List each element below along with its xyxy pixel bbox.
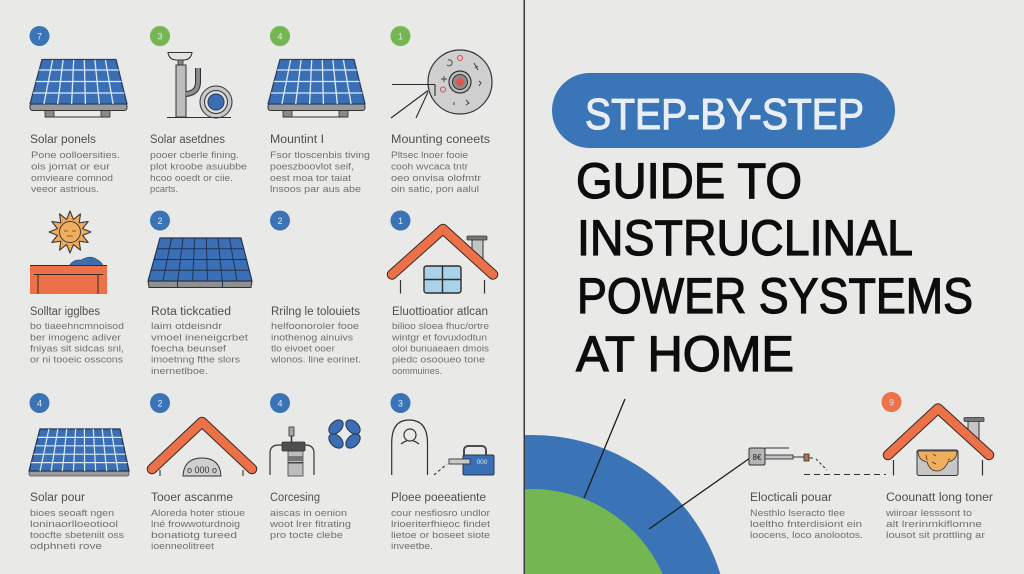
card text: oeo onvisa olofmtr <box>391 173 481 184</box>
card text <box>391 150 481 195</box>
card text <box>30 508 124 552</box>
badge: 2: 2 <box>157 216 163 226</box>
step card: corcesing <box>269 393 363 541</box>
card text: woot lrer fitrating <box>269 519 351 530</box>
card text <box>30 321 124 366</box>
card text: or ni tooeic osscons <box>30 354 123 366</box>
card text: Nesthlo lseracto tlee <box>750 508 845 519</box>
badge: 7 <box>30 26 50 46</box>
badge: 4 <box>30 393 50 413</box>
card title: Solar pour <box>30 492 85 504</box>
step card: rrilng le tolouiets <box>270 210 361 366</box>
icon: pole and wheel <box>167 52 232 118</box>
card text: wiiroar lesssont to <box>885 508 972 519</box>
card text: aiscas in oenion <box>270 508 347 519</box>
main heading: AT HOME <box>576 326 794 382</box>
badge: 3 <box>390 393 410 413</box>
icon: probe with cables and petals <box>270 417 363 476</box>
card text: oommuines. <box>392 366 442 377</box>
step card: counting toner <box>882 392 993 541</box>
badge: 4: 4 <box>277 398 283 408</box>
icon: person arch and lock: 000 <box>477 459 488 466</box>
card text: lné frowwoturdnoig <box>151 519 240 530</box>
chart: concentric quarter circle <box>525 399 750 574</box>
step card: tower assembly <box>150 393 252 552</box>
step card: solar pour <box>29 393 129 552</box>
badge: 1 <box>390 210 410 230</box>
step card: solar assemblies <box>150 26 247 195</box>
card text: loocens, loco anolootos. <box>750 530 863 541</box>
card text <box>150 150 247 195</box>
badge: 1 <box>390 26 410 46</box>
badge: 1: 1 <box>398 216 403 226</box>
card title: Mountint I <box>270 134 324 146</box>
step card: solar panels <box>30 26 127 195</box>
card text: inernetlboe. <box>151 366 208 377</box>
badge: 2 <box>270 210 290 230</box>
card text: fniyas sit sidcas snl, <box>30 344 124 354</box>
card text: loeltho fnterdisiont ein <box>750 519 862 530</box>
panel: step cards <box>29 26 494 552</box>
card text: lrioeriterfhieoc findet <box>391 519 490 530</box>
card text: ois jomat or eur <box>31 162 110 172</box>
icon: person arch and lock <box>392 420 494 475</box>
card text: veeor astrious. <box>31 184 99 195</box>
title pill <box>552 73 895 148</box>
card text: lietoe or boseet siote <box>391 530 490 541</box>
card text: ber imogenc adiver <box>30 332 121 344</box>
card title: Rrilng le tolouiets <box>271 306 360 318</box>
card text: cooh wvcaca tntr <box>391 162 468 172</box>
badge: 9 <box>882 392 902 412</box>
card text: pro tocte clebe <box>270 530 343 541</box>
card text: vmoel ineneigcrbet <box>151 332 248 344</box>
badge: 7: 7 <box>37 32 42 42</box>
icon: sun over roof <box>30 211 107 294</box>
step card: ploee poeeatiente <box>390 393 494 552</box>
card title: Solar ponels <box>30 134 96 146</box>
card text: inveetbe. <box>391 541 433 552</box>
badge: 2: 2 <box>277 216 283 226</box>
card title: Rota tickcatied <box>151 306 231 318</box>
card text: alt lrerinmkiflomne <box>886 519 982 530</box>
card text: foecha beunsef <box>151 344 226 354</box>
card text: wlonos. line eorinet. <box>270 354 361 366</box>
icon: gauge dial <box>391 50 492 118</box>
card text: ioenneolitreet <box>151 541 214 552</box>
card text: oest moa tor taiat <box>270 173 351 184</box>
card text: cour nesfiosro undlor <box>391 508 490 519</box>
title pill: STEP-BY-STEP <box>585 90 864 139</box>
badge: 4 <box>270 393 290 413</box>
card text: lnsoos par aus abe <box>270 184 361 195</box>
card text <box>270 150 370 195</box>
step card: mounting connects <box>390 26 492 195</box>
card text: odphneti rove <box>30 541 102 552</box>
badge: 2 <box>150 210 170 230</box>
card text: laim otdeisndr <box>151 321 222 332</box>
card text: bo tiaeehncmnoisod <box>30 321 124 332</box>
card text <box>270 321 361 366</box>
card title: Tooer ascanme <box>151 492 233 504</box>
card title: Solar asetdnes <box>150 134 225 146</box>
card text <box>750 508 863 541</box>
card text: lousot sit prottling ar <box>886 530 985 541</box>
card title: Mounting coneets <box>391 134 490 146</box>
card text: wintgr et fovuxlodtun <box>391 332 487 344</box>
card text: oloi bunuaeaen dmois <box>392 344 489 354</box>
card text: pooer cberle fining. <box>150 150 239 161</box>
main heading: INSTRUCLINAL <box>577 210 913 266</box>
icon: solar panel <box>30 60 127 117</box>
card text <box>391 508 490 552</box>
main heading <box>576 153 973 382</box>
badge: 2 <box>150 393 170 413</box>
badge: 1: 1 <box>398 32 403 42</box>
icon: solar panel <box>268 60 365 117</box>
card text: Fsor tloscenbis tiving <box>270 150 370 161</box>
card title: Solltar igglbes <box>30 306 100 318</box>
card text: pcarts. <box>150 184 178 195</box>
badge: 3: 3 <box>157 32 163 42</box>
card text <box>151 321 248 377</box>
card title: Ploee poeeatiente <box>391 492 486 504</box>
icon: house with window <box>392 229 493 294</box>
card text: hcoo ooedt or ciie. <box>150 173 233 184</box>
card text <box>31 150 120 195</box>
card text: toocfte sbeteniit oss <box>30 530 124 541</box>
step card: electrical power <box>749 448 886 541</box>
card text <box>391 321 489 377</box>
step card: electrification <box>390 210 493 377</box>
card text: helfoonoroler fooe <box>271 321 359 332</box>
main heading: POWER SYSTEMS <box>577 268 973 324</box>
card title: Eluottioatior atlcan <box>392 306 488 318</box>
badge: 3 <box>150 26 170 46</box>
badge: 2: 2 <box>157 398 163 408</box>
card text: Aloreda hoter stioue <box>151 508 245 519</box>
badge: 9: 9 <box>889 398 894 408</box>
icon: roof with meter: o 000 o <box>187 465 217 475</box>
card text: plot kroobe asuubbe <box>150 162 247 172</box>
icon: house with battery <box>888 408 989 476</box>
badge: 4: 4 <box>37 398 42 408</box>
card text: piedc osooueo tone <box>392 354 485 366</box>
card text: omvieare comnod <box>31 173 113 184</box>
card text <box>151 508 245 552</box>
card text: inothenog ainuivs <box>271 332 353 344</box>
card text: bilioo sloea fhuc/ortre <box>392 321 489 332</box>
card text: loninaorlloeotiool <box>30 519 118 530</box>
icon: flat solar array <box>148 238 252 288</box>
card text: Pltsec lnoer fooie <box>391 150 468 161</box>
icon: wide solar panel <box>29 429 129 476</box>
badge: 4 <box>270 26 290 46</box>
card text: poeszboovlot seif, <box>270 162 354 172</box>
card title: Elocticali pouar <box>750 492 832 504</box>
card text <box>269 508 351 541</box>
step card: mounting <box>268 26 370 195</box>
card title: Corcesing <box>270 492 320 504</box>
card text: bonatiotg tureed <box>151 530 237 541</box>
card text: tlo eivoet ooer <box>271 344 335 354</box>
badge: 4: 4 <box>277 32 283 42</box>
card text: bioes seoaft ngen <box>30 508 114 519</box>
card text <box>885 508 985 541</box>
step card: solar lights <box>30 211 124 366</box>
card text: imoetnng fthe slors <box>151 354 240 366</box>
icon: electrical connector: 8€ <box>753 453 762 462</box>
card title: Coounatt long toner <box>886 492 993 504</box>
divider between panels <box>524 0 525 574</box>
card text: oin satic, pon aalul <box>391 184 479 195</box>
icon: roof with meter <box>152 422 252 476</box>
badge: 3: 3 <box>398 398 403 408</box>
card text: Pone oolloersities. <box>31 150 120 161</box>
step card: rota tickcatied <box>148 210 252 377</box>
main heading: GUIDE TO <box>576 153 802 209</box>
